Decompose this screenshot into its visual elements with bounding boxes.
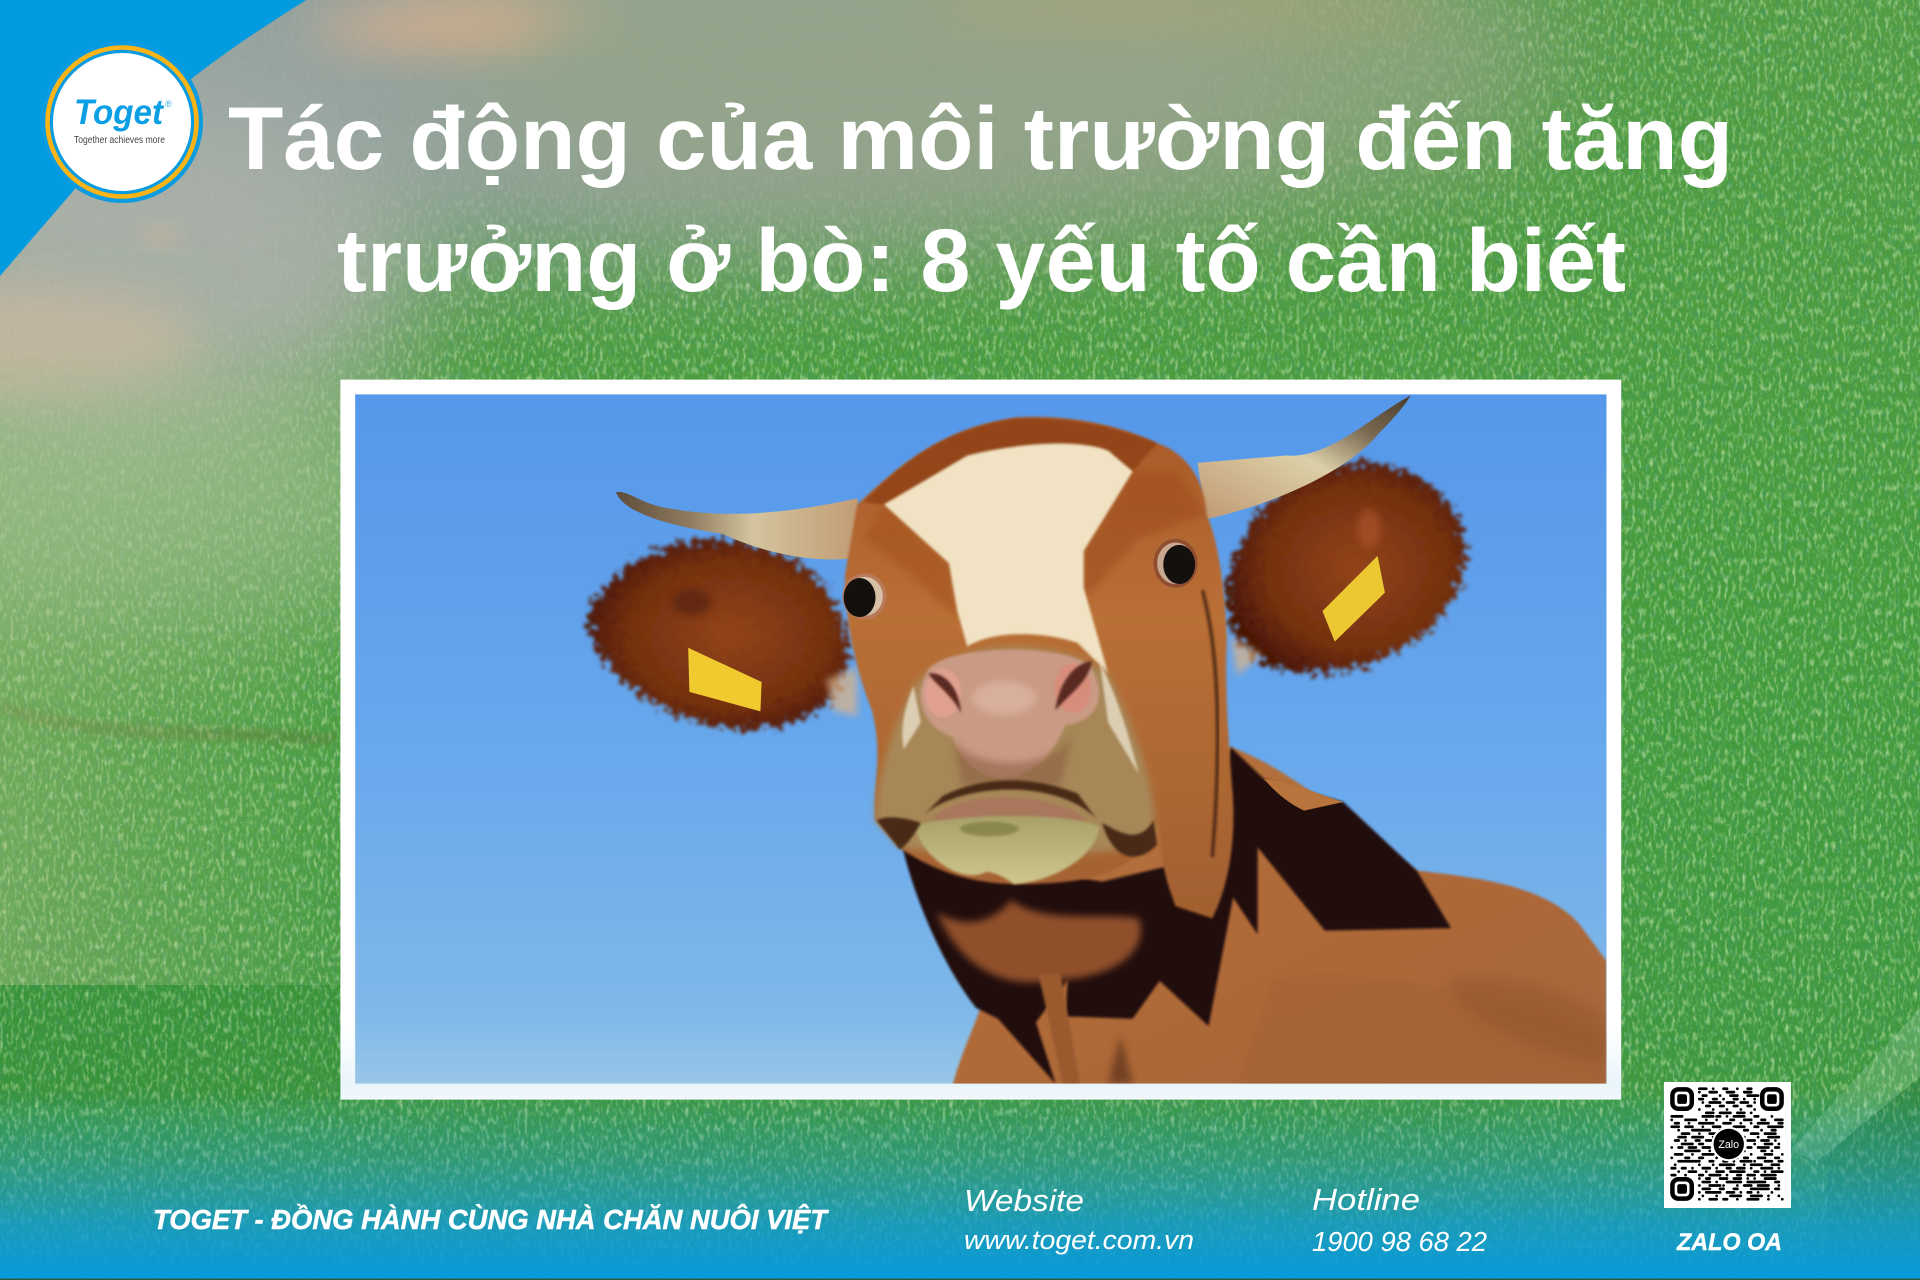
neck crease [1202,590,1218,857]
hotline label: Hotline [1312,1182,1420,1217]
website label: Website [964,1183,1084,1218]
jaw corners [877,817,1157,857]
cow body [953,747,1607,1085]
logo registered mark: ® [165,99,172,109]
right nostril [1054,664,1091,713]
top-left blue corner shape [0,0,306,276]
dewlap [937,900,1141,982]
QR finder patterns [1672,1089,1782,1199]
QR centre Zalo badge: Zalo [1718,1139,1739,1151]
hotline number: 1900 98 68 22 [1312,1226,1487,1257]
white forehead blaze [884,444,1133,673]
muzzle sides [876,647,1154,855]
footer website block [964,1183,1194,1255]
cow head [845,417,1233,918]
background: faint house shape, bottom right [1790,1008,1920,1280]
left ear tag [688,648,762,711]
QR data modules [1672,1089,1782,1199]
footer slogan: TOGET - ĐỒNG HÀNH CÙNG NHÀ CHĂN NUÔI VIỆT [153,1203,830,1235]
crown shading [863,419,1157,504]
left ear [585,540,848,729]
website url: www.toget.com.vn [964,1225,1194,1255]
cow photo [355,394,1607,1085]
logo badge [41,41,203,203]
footer hotline block [1312,1182,1487,1257]
right eye [1153,539,1198,588]
footer blue gradient band [0,1090,1920,1280]
zalo label: ZALO OA [1676,1229,1782,1256]
left eye [842,573,887,620]
mouth line [924,780,1096,818]
left nostril [924,669,961,718]
title [228,88,1733,310]
pink nose [921,650,1099,778]
logo tagline: Together achieves more [74,135,165,146]
logo wordmark: Toget [74,93,164,132]
right horn [1198,396,1411,519]
left horn [616,492,863,559]
chin [915,816,1100,884]
QR code card [1664,1082,1791,1208]
nose highlight [972,681,1036,715]
photo panel: cow against blue sky [340,380,1621,1100]
shadow on neck and shoulder [902,747,1451,1084]
photo white frame [340,380,1621,1100]
right ear [1227,463,1465,673]
title line 2: trưởng ở bò: 8 yếu tố cần biết [337,210,1626,310]
lower lip [933,797,1087,834]
right ear tag [1322,556,1385,642]
title line 1: Tác động của môi trường đến tăng [228,88,1733,188]
